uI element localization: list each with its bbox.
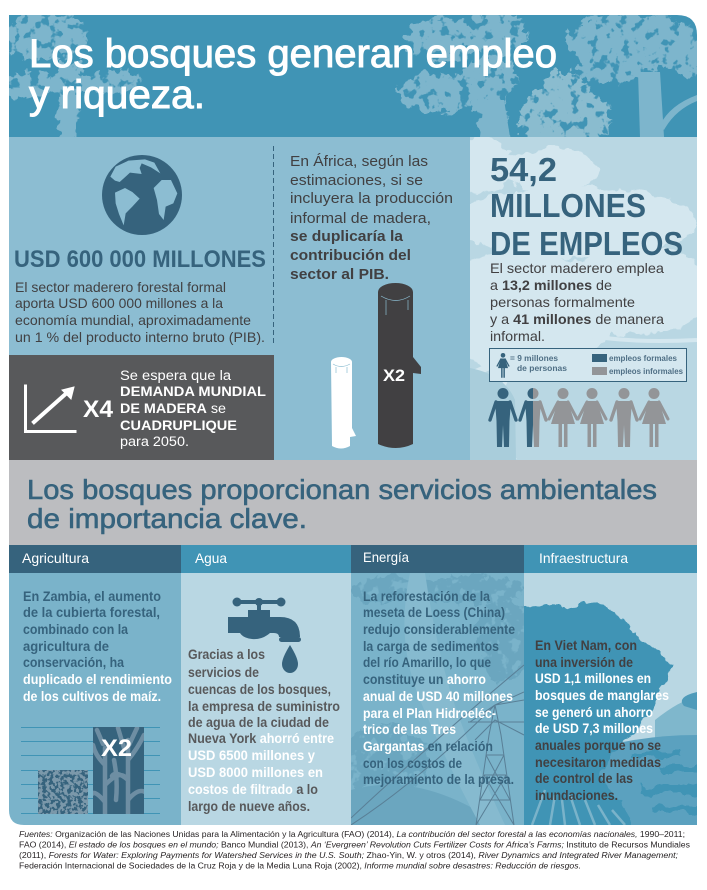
panel: environmental services heading: de importancia clave. xyxy=(27,503,307,534)
energy text: para el Plan Hidroeléc- xyxy=(363,706,496,721)
infrastructure text: se generó un ahorro xyxy=(535,705,653,720)
chart: crop yield bars xyxy=(21,727,160,814)
callout: demand x4 xyxy=(9,355,274,460)
water text: costos de filtrado a lo xyxy=(188,782,318,797)
agriculture text: combinado con la xyxy=(23,622,128,637)
energy text: meseta de Loess (China) xyxy=(363,605,505,620)
infrastructure text: bosques de manglares xyxy=(535,688,669,703)
panel: header banner xyxy=(9,15,697,137)
panel: employment xyxy=(470,137,697,460)
infrastructure text: En Viet Nam, con xyxy=(535,638,637,653)
callout: demand x4: DE MADERA se xyxy=(120,401,226,416)
mangrove background xyxy=(524,601,697,825)
africa text: se duplicaría la xyxy=(290,228,404,245)
africa text: sector al PIB. xyxy=(290,266,389,283)
agriculture text xyxy=(23,589,172,704)
panel: agua: Agua xyxy=(195,550,227,566)
main title xyxy=(29,32,557,117)
infrastructure text: USD 1,1 millones en xyxy=(535,671,651,686)
sources footnote: Fuentes: Organización de las Naciones Unidas para la Alimentación y la Agricultura (FAO) (2014), La contribución del sector forestal a las economías nacionales, 1990–2011; xyxy=(19,829,685,839)
infrastructure text: una inversión de xyxy=(535,655,633,670)
infrastructure text: necesitaron medidas xyxy=(535,755,661,770)
economy body text xyxy=(15,279,265,345)
callout: demand x4: X4 xyxy=(83,396,114,423)
energy text: del río Amarillo, lo que xyxy=(363,655,491,670)
icon: dark log x2: X2 xyxy=(383,366,405,385)
panel: economy xyxy=(9,137,470,460)
icon: globe xyxy=(102,155,182,235)
stat heading: USD 600 000 MILLONES xyxy=(14,246,266,273)
energy text: con los costos de xyxy=(363,756,462,771)
employment body text: y a 41 millones de manera xyxy=(490,311,664,327)
panel: environmental services heading xyxy=(9,460,697,545)
energy text xyxy=(363,589,515,787)
energy text: Gargantas en relación xyxy=(363,739,493,754)
energy text: mejoramiento de la presa. xyxy=(363,772,514,787)
employment body text: El sector maderero emplea xyxy=(490,260,664,276)
panel: energía xyxy=(351,545,524,825)
infrastructure text: anuales porque no se xyxy=(535,738,661,753)
africa text: En África, según las xyxy=(290,153,428,170)
panel: energía: Energía xyxy=(363,549,409,565)
infrastructure text: de control de las xyxy=(535,771,633,786)
icon: faucet and drop xyxy=(228,598,301,673)
sources footnote xyxy=(19,829,691,870)
legend: empleos formales xyxy=(609,354,678,363)
icon: growth chart arrow xyxy=(26,386,75,432)
panel: agricultura xyxy=(9,545,181,825)
sources footnote: FAO (2014), El estado de los bosques en el mundo; Banco Mundial (2013), An ‘Evergreen’ Revolution Cuts Fertilizer Costs for Africa’s Farms; Instituto de Recursos Mundiales xyxy=(19,840,691,850)
africa text: estimaciones, si se xyxy=(290,172,423,189)
agriculture text: de los cultivos de maíz. xyxy=(23,689,161,704)
energy text: redujo considerablemente xyxy=(363,622,515,637)
infrastructure text: inundaciones. xyxy=(535,788,618,803)
panel: infraestructura xyxy=(524,545,697,825)
africa text: incluyera la producción xyxy=(290,190,453,207)
water text: USD 6500 millones y xyxy=(188,748,315,763)
stat: 54,2 millones: MILLONES xyxy=(490,187,646,224)
agriculture text: agricultura de xyxy=(23,639,109,654)
employment body text: informal. xyxy=(490,328,545,344)
sources footnote: Federación Internacional de Sociedades de la Cruz Roja y de la Media Luna Roja (2002), Informe mundial sobre desastres: Reducción de riesgos. xyxy=(19,860,581,870)
water text: Gracias a los xyxy=(188,647,265,662)
energy text: trico de las Tres xyxy=(363,722,456,737)
background tree xyxy=(470,137,697,460)
agriculture text: duplicado el rendimiento xyxy=(23,672,172,687)
legend: = 9 millones xyxy=(510,354,559,363)
water text xyxy=(188,647,340,814)
icon: white log xyxy=(331,357,356,448)
economy body text: un 1 % del producto interno bruto (PIB). xyxy=(15,329,265,345)
agriculture text: conservación, ha xyxy=(23,655,124,670)
water text: USD 8000 millones en xyxy=(188,765,323,780)
water text: servicios de xyxy=(188,665,259,680)
agriculture text: En Zambia, el aumento xyxy=(23,589,161,604)
infrastructure text xyxy=(535,638,669,803)
panel: environmental services heading: Los bosques proporcionan servicios ambientales xyxy=(27,474,657,505)
stat: 54,2 millones xyxy=(490,151,683,262)
legend: empleos informales xyxy=(609,367,684,376)
stat: 54,2 millones: 54,2 xyxy=(490,151,557,188)
water text: la empresa de suministro xyxy=(188,699,340,714)
header tree silhouettes xyxy=(9,15,697,137)
callout: demand x4: CUADRUPLIQUE xyxy=(120,418,237,433)
panel: infraestructura: Infraestructura xyxy=(539,550,628,566)
sources footnote: (2011), Forests for Water: Exploring Payments for Watershed Services in the U.S. South; Zhao-Yin, W. y otros (2014), River Dynamics and Integrated River Management; xyxy=(19,850,679,860)
panel: agricultura: Agricultura xyxy=(22,550,89,566)
energy text: La reforestación de la xyxy=(363,589,490,604)
callout: demand x4: Se espera que la xyxy=(120,368,232,383)
panel: agua xyxy=(181,545,351,825)
water text: Nueva York ahorró entre xyxy=(188,731,334,746)
infrastructure text: de USD 7,3 millones xyxy=(535,721,653,736)
agriculture text: de la cubierta forestal, xyxy=(23,605,160,620)
callout: demand x4: para 2050. xyxy=(120,434,189,449)
legend xyxy=(490,348,686,382)
water text: cuencas de los bosques, xyxy=(188,682,331,697)
energy text: constituye un ahorro xyxy=(363,672,486,687)
africa text xyxy=(290,153,453,283)
chart: crop yield bars: X2 xyxy=(101,735,132,762)
pictogram: people xyxy=(490,388,668,447)
energy text: la carga de sedimentos xyxy=(363,639,499,654)
employment body text: personas formalmente xyxy=(490,294,635,310)
economy body text: El sector maderero forestal formal xyxy=(15,279,226,295)
energy background landscape xyxy=(351,573,524,825)
africa text: informal de madera, xyxy=(290,210,431,227)
employment body text: a 13,2 millones de xyxy=(490,277,612,293)
main title: y riqueza. xyxy=(29,73,205,117)
stat: 54,2 millones: DE EMPLEOS xyxy=(490,225,683,262)
main title: Los bosques generan empleo xyxy=(29,32,557,76)
icon: dark log x2 xyxy=(378,283,421,448)
africa text: contribución del xyxy=(290,247,411,264)
legend: de personas xyxy=(517,364,568,373)
water text: de agua de la ciudad de xyxy=(188,715,329,730)
energy text: anual de USD 40 millones xyxy=(363,689,513,704)
economy body text: economía mundial, aproximadamente xyxy=(15,312,251,328)
employment body text xyxy=(490,260,664,344)
water text: largo de nueve años. xyxy=(188,799,310,814)
callout: demand x4: DEMANDA MUNDIAL xyxy=(120,384,266,399)
economy body text: aporta USD 600 000 millones a la xyxy=(15,295,223,311)
